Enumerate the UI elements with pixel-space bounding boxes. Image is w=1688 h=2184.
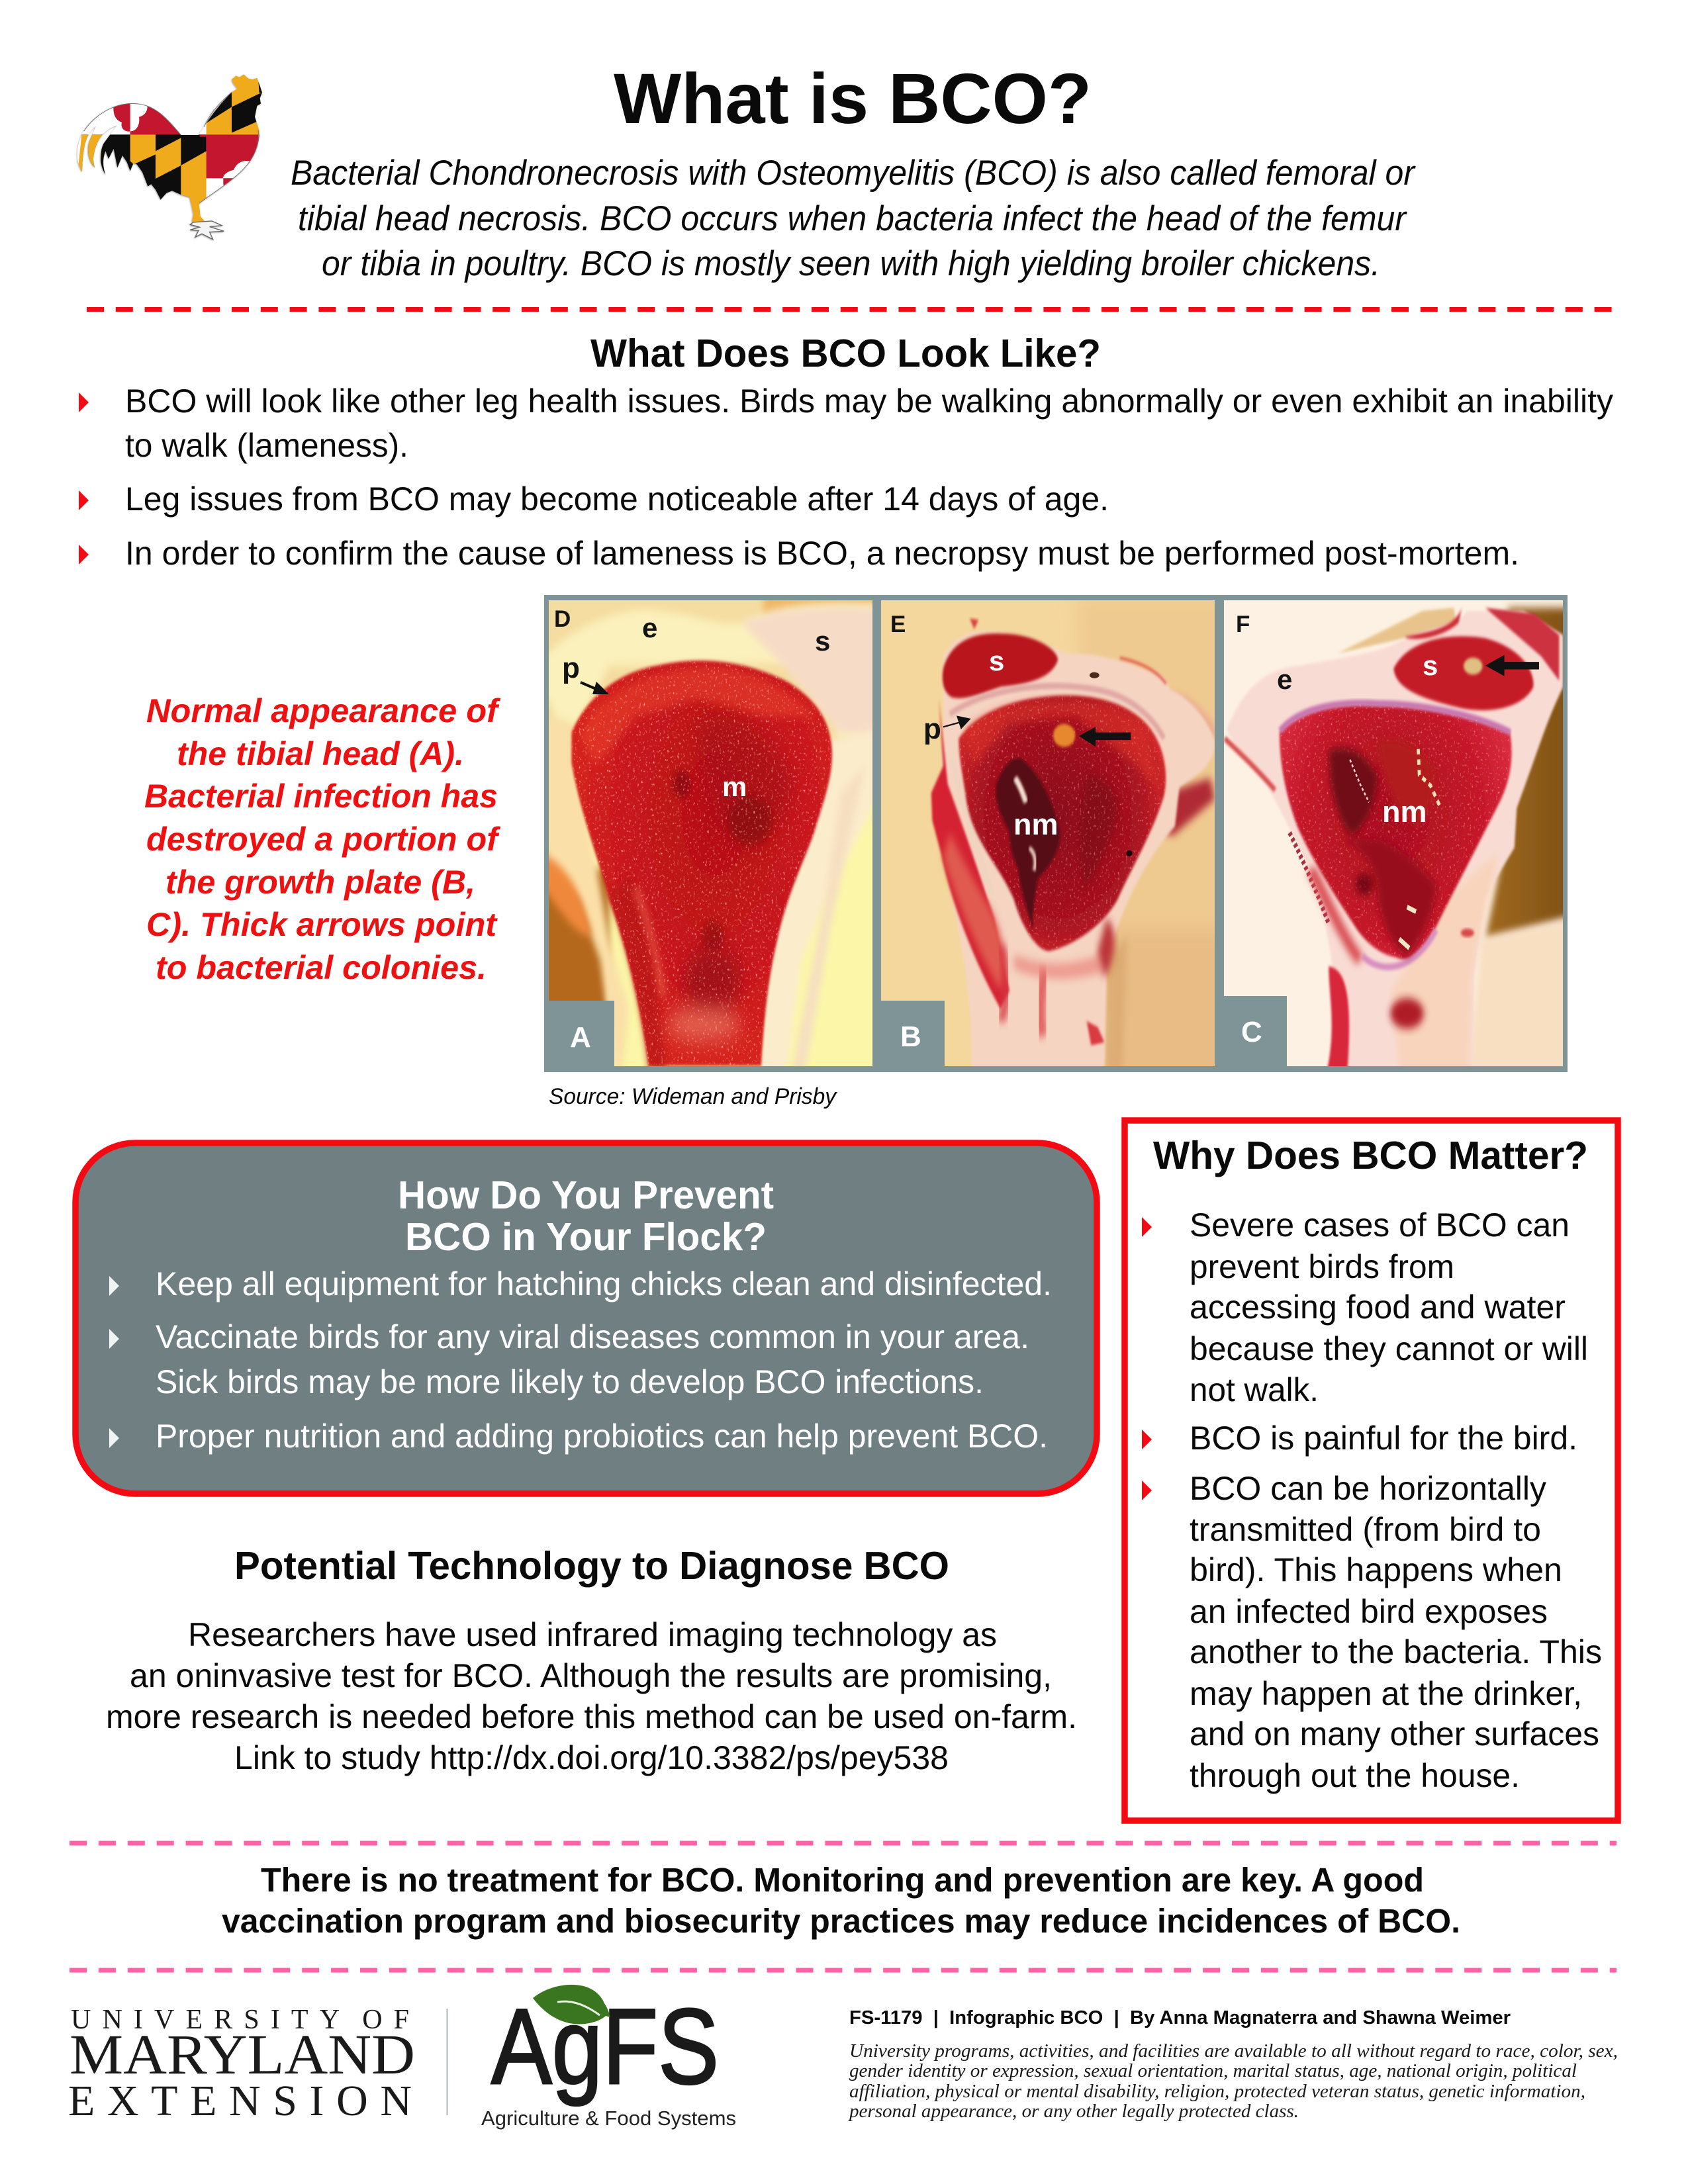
bullet list: why: BCO is painful for the bird. xyxy=(1190,1420,1577,1457)
callout: no treatment conclusion: vaccination program and biosecurity practices may reduce incidences of BCO. xyxy=(222,1902,1460,1940)
photo labels: C xyxy=(1241,1016,1262,1048)
title: What is BCO? xyxy=(614,58,1092,138)
bullet list: why: accessing food and water xyxy=(1190,1289,1566,1326)
bullet list: prevention: Vaccinate birds for any viral diseases common in your area. xyxy=(156,1318,1029,1355)
callout: no treatment conclusion: There is no treatment for BCO. Monitoring and prevention are key. A good xyxy=(261,1861,1424,1899)
photo labels: D xyxy=(554,606,571,632)
text block: potential technology: Researchers have used infrared imaging technology as xyxy=(188,1616,997,1653)
bullet list: why: BCO can be horizontally xyxy=(1190,1470,1546,1507)
heading: prevent xyxy=(398,1173,774,1259)
bullet list: why: and on many other surfaces xyxy=(1190,1715,1599,1752)
panel: why does BCO matter xyxy=(1125,1120,1618,1821)
logo: University of Maryland Extension: MARYLAND xyxy=(70,2023,415,2086)
photo labels: p xyxy=(923,713,941,745)
bullet list: what BCO looks like: BCO will look like other leg health issues. Birds may be walking abnormally or even exhibit an inability xyxy=(125,383,1613,420)
footer disclaimer: affiliation, physical or mental disability, religion, protected veteran status, genetic information, xyxy=(849,2081,1585,2102)
photo labels: p xyxy=(562,652,580,684)
photo labels: s xyxy=(989,645,1004,676)
photo labels: nm xyxy=(1013,807,1058,841)
bullet list: why: another to the bacteria. This xyxy=(1190,1633,1602,1670)
bullet list: why: not walk. xyxy=(1190,1371,1319,1408)
heading: potential technology: Potential Technology to Diagnose BCO xyxy=(234,1544,949,1588)
bullet list: prevention: Keep all equipment for hatching chicks clean and disinfected. xyxy=(156,1265,1052,1302)
bullet list: why: transmitted (from bird to xyxy=(1190,1511,1541,1548)
callout: red caption: Bacterial infection has xyxy=(144,778,498,815)
heading: why: Why Does BCO Matter? xyxy=(1153,1134,1588,1177)
photo labels: F xyxy=(1236,612,1250,637)
bullet list: what BCO looks like: Leg issues from BCO may become noticeable after 14 days of age. xyxy=(125,480,1109,518)
photo labels: s xyxy=(815,625,830,657)
photo labels: e xyxy=(1277,664,1292,695)
intro paragraph xyxy=(291,154,1416,283)
logo: AgFS Agriculture and Food Systems: Agriculture & Food Systems xyxy=(481,2107,736,2130)
callout: red caption: the tibial head (A). xyxy=(177,735,464,772)
bullet list: why: bird). This happens when xyxy=(1190,1551,1562,1588)
logo: University of Maryland Extension: EXTENSION xyxy=(68,2077,412,2125)
icon: green leaf xyxy=(533,1985,610,2024)
callout: red caption: to bacterial colonies. xyxy=(156,949,487,986)
bullet list: prevention: Sick birds may be more likely to develop BCO infections. xyxy=(156,1363,984,1400)
footer disclaimer: personal appearance, or any other legally protected class. xyxy=(848,2101,1299,2122)
heading: prevent: BCO in Your Flock? xyxy=(405,1215,767,1259)
footer byline: FS-1179 | Infographic BCO | By Anna Magnaterra and Shawna Weimer xyxy=(849,2007,1511,2028)
photo labels: B xyxy=(900,1021,921,1053)
photo labels: E xyxy=(890,612,906,637)
footer disclaimer xyxy=(848,2040,1618,2122)
text block: potential technology: Link to study http://dx.doi.org/10.3382/ps/pey538 xyxy=(234,1739,949,1776)
bullet list: prevention xyxy=(109,1265,1052,1455)
bullet list: why: through out the house. xyxy=(1190,1757,1520,1794)
heading: What Does BCO Look Like?: What Does BCO Look Like? xyxy=(590,332,1101,375)
photo panel: three tibial heads xyxy=(544,595,1568,1072)
footer disclaimer: gender identity or expression, sexual orientation, marital status, age, national origin, political xyxy=(849,2060,1577,2081)
bullet list: why: prevent birds from xyxy=(1190,1248,1454,1285)
photo labels: m xyxy=(722,771,747,802)
logo: University of Maryland Extension xyxy=(68,2005,415,2125)
photo labels: e xyxy=(642,612,657,643)
text block: potential technology: an oninvasive test for BCO. Although the results are promising, xyxy=(130,1657,1052,1694)
icon: Maryland flag rooster logo xyxy=(73,73,271,240)
intro paragraph: tibial head necrosis. BCO occurs when bacteria infect the head of the femur xyxy=(298,199,1407,238)
callout: red caption xyxy=(144,692,500,986)
bullet list: what BCO looks like: In order to confirm the cause of lameness is BCO, a necropsy must be performed post-mortem. xyxy=(125,535,1519,572)
callout: red caption: C). Thick arrows point xyxy=(146,906,498,943)
footer disclaimer: University programs, activities, and facilities are available to all without regard to race, color, sex, xyxy=(849,2040,1618,2062)
photo labels xyxy=(554,606,1438,1054)
photo labels: A xyxy=(570,1021,591,1054)
photo C: infected tibial head xyxy=(1221,596,1579,1082)
panel: how do you prevent xyxy=(75,1143,1097,1494)
text block: potential technology xyxy=(106,1616,1077,1776)
bullet list: prevention: Proper nutrition and adding probiotics can help prevent BCO. xyxy=(156,1418,1048,1455)
callout: red caption: the growth plate (B, xyxy=(165,864,475,901)
photo label boxes xyxy=(544,996,1287,1072)
logo: University of Maryland Extension: UNIVERSITY OF xyxy=(71,2005,409,2035)
logo: AgFS Agriculture and Food Systems: AgFS xyxy=(491,1987,719,2107)
bullet list: why xyxy=(1142,1206,1602,1794)
intro paragraph: Bacterial Chondronecrosis with Osteomyelitis (BCO) is also called femoral or xyxy=(291,154,1416,193)
bullet list: why: an infected bird exposes xyxy=(1190,1593,1548,1630)
callout: red caption: Normal appearance of xyxy=(146,692,500,729)
text block: potential technology: more research is needed before this method can be used on-farm. xyxy=(106,1698,1077,1735)
bullet list: why: may happen at the drinker, xyxy=(1190,1675,1582,1712)
callout: red caption: destroyed a portion of xyxy=(146,821,500,858)
photo source: Source: Wideman and Prisby xyxy=(549,1084,837,1109)
photo labels: s xyxy=(1423,650,1438,681)
photo labels: nm xyxy=(1382,795,1427,829)
callout: no treatment conclusion xyxy=(222,1861,1460,1940)
bullet list: what BCO looks like xyxy=(79,383,1613,572)
photo A: normal tibial head xyxy=(534,584,889,1082)
bullet list: why: Severe cases of BCO can xyxy=(1190,1206,1570,1244)
intro paragraph: or tibia in poultry. BCO is mostly seen with high yielding broiler chickens. xyxy=(322,244,1380,283)
bullet list: what BCO looks like: to walk (lameness). xyxy=(125,427,408,464)
bullet list: why: because they cannot or will xyxy=(1190,1330,1588,1367)
heading: prevent: How Do You Prevent xyxy=(398,1173,774,1217)
photo B: infected tibial head xyxy=(881,600,1215,1066)
